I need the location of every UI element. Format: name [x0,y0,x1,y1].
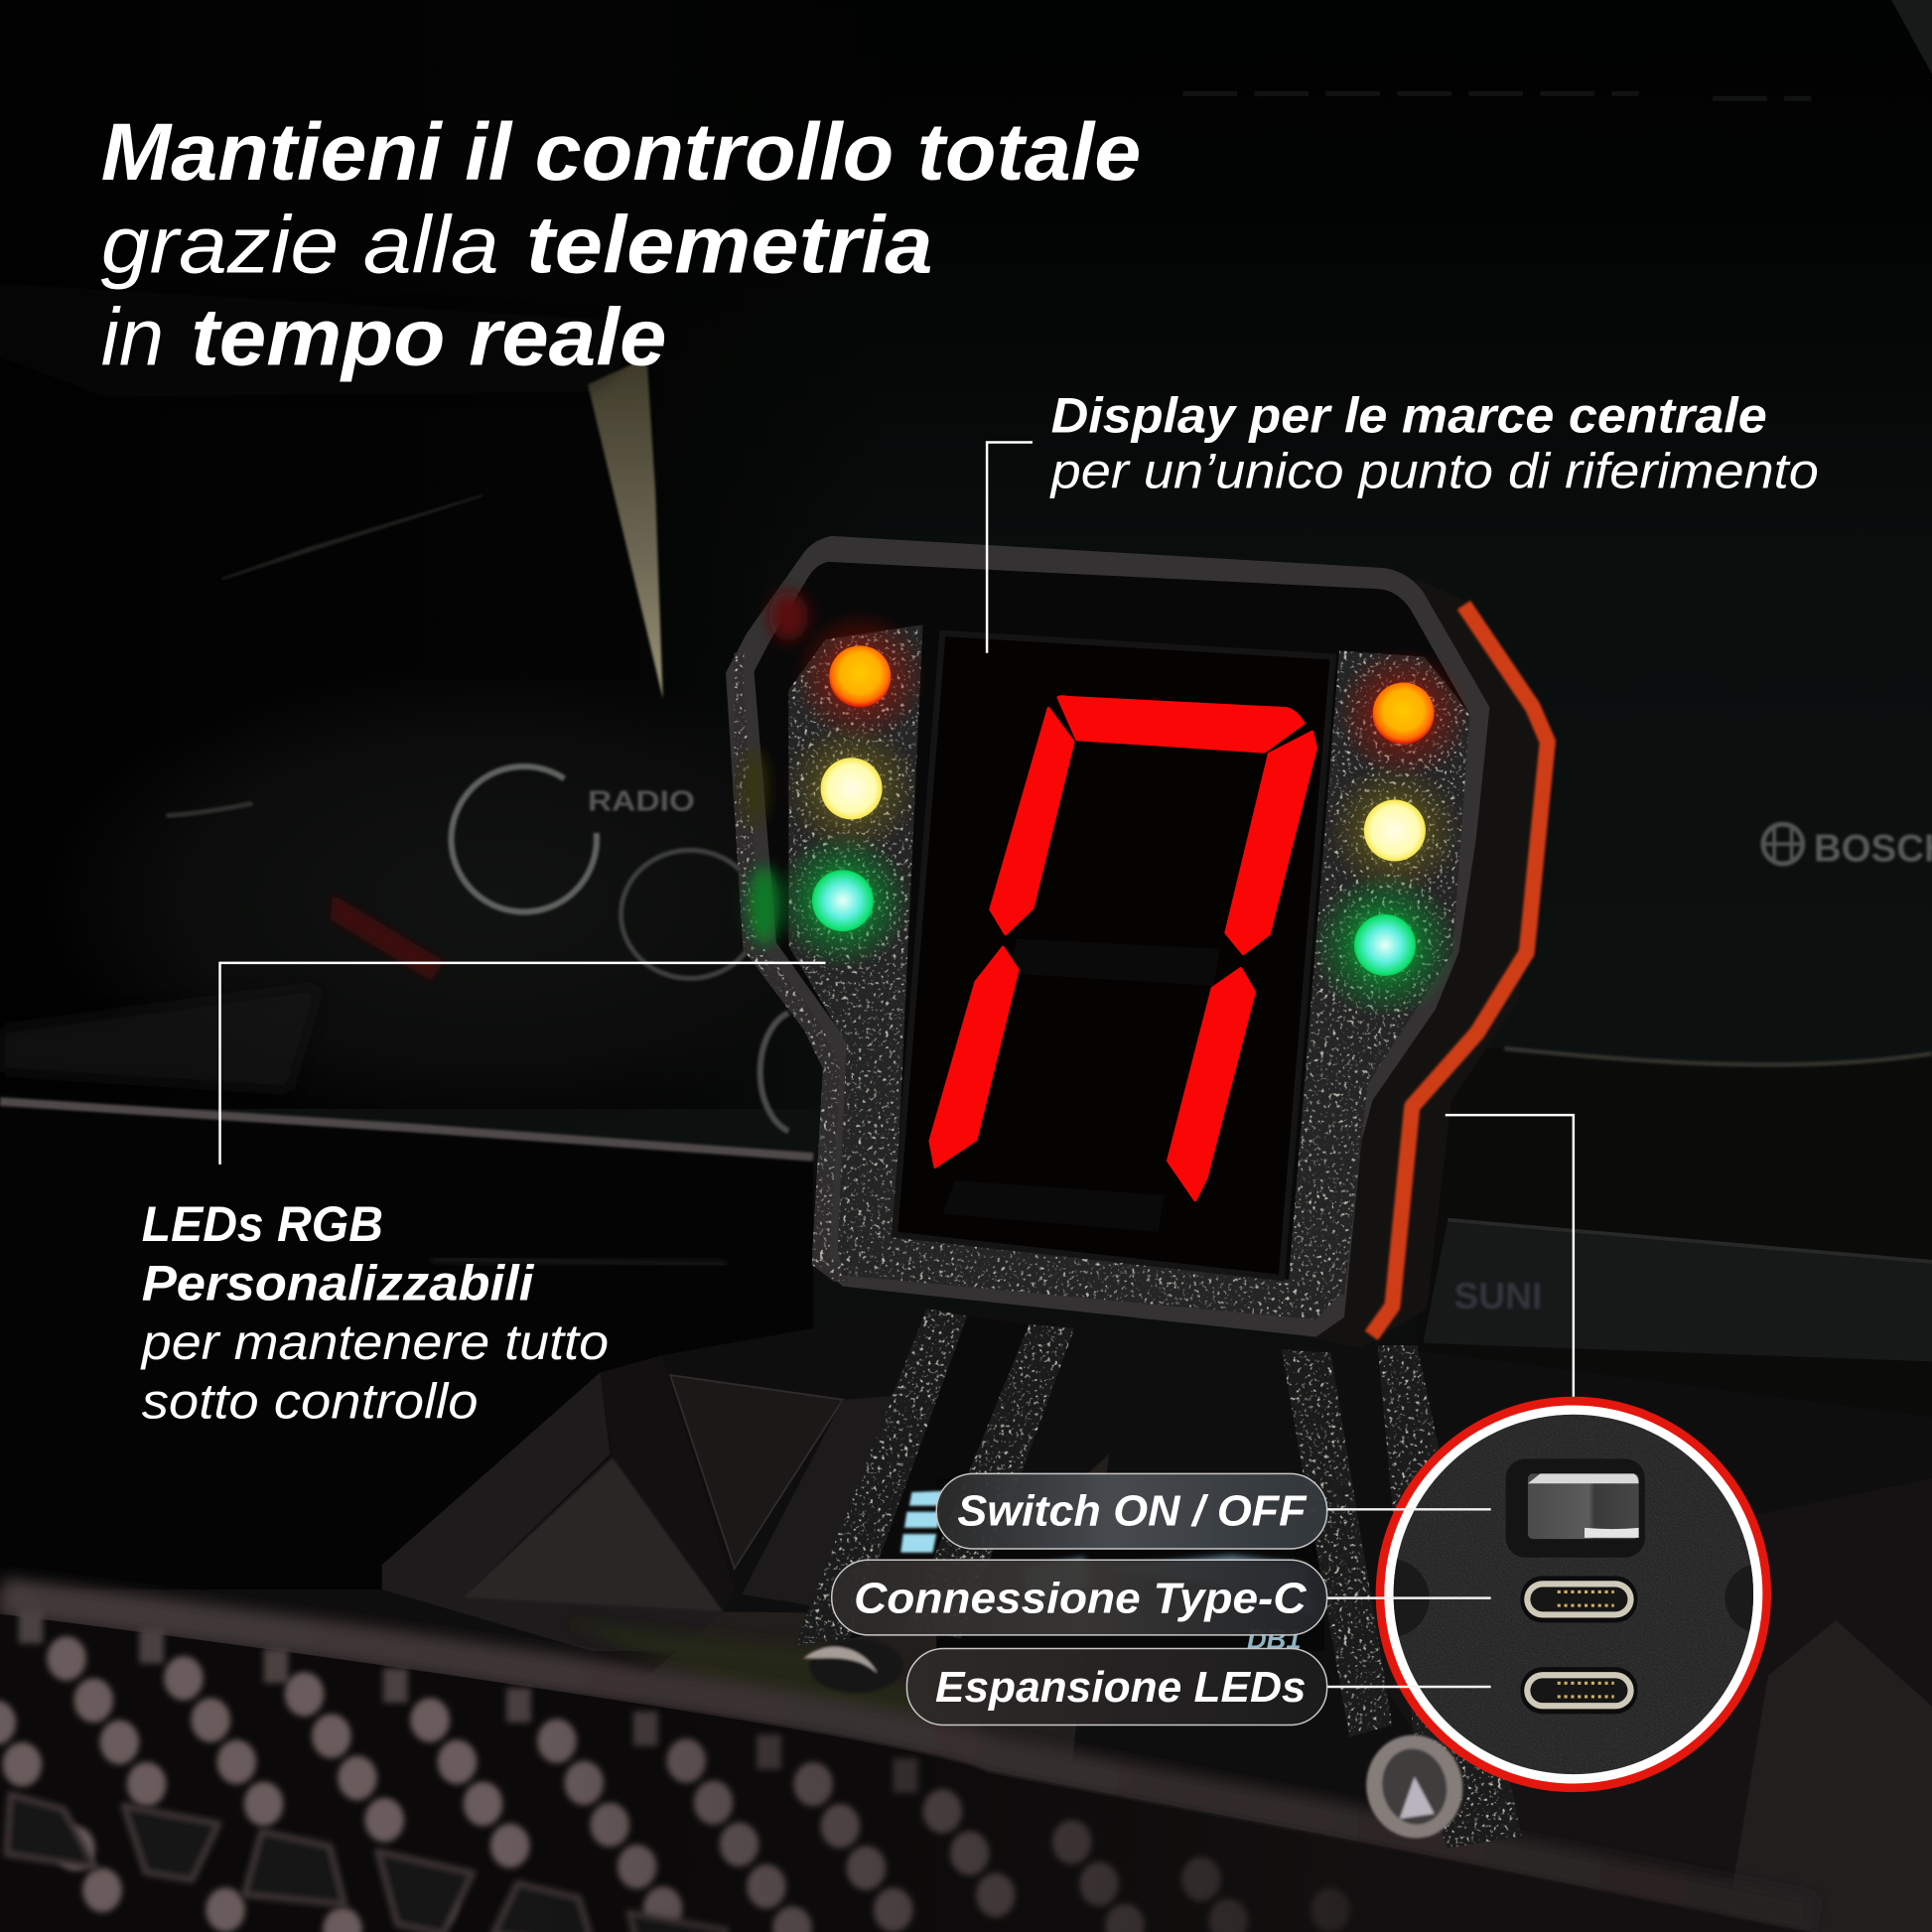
device: inner black cavity [755,562,1468,1313]
mesh: light top band [0,1596,1811,1917]
text block: LEDs callout: LEDs RGB [142,1196,383,1252]
text block: display callout [1048,388,1819,498]
segment: upper right [1226,732,1315,954]
background: center-right lower band [1417,1048,1932,1932]
mesh: woven dots [0,1632,1809,1932]
device: shell side with orange stripe [1307,579,1558,1348]
text block: display callout: per un’unico punto di riferimento [1048,443,1819,498]
text block: LEDs callout: per mantenere tutto [140,1314,609,1370]
text block: LEDs callout: Personalizzabili [142,1255,535,1311]
title: tempo reale [191,292,666,382]
seven-segment digit 7 [930,697,1315,1200]
carbon mesh grille [0,1589,1811,1932]
cyan display behind the stand: DB1 [1247,1624,1302,1655]
pill: Espansione LEDs [906,1649,1327,1725]
text block: display callout: Display per le marce centrale [1051,388,1767,444]
background: striped carbon trim [0,283,663,816]
device: left LED glow bleeding onto rim [743,592,808,945]
pill: Connessione Type-C [832,1560,1327,1635]
background: trim line left [0,1102,813,1157]
background: Bosch logo [1763,824,1932,871]
background: center console [0,1309,1932,1932]
LEDs: right column [1311,647,1470,1019]
background: carbon strip left [0,986,321,1090]
title [101,107,1141,382]
pill: Switch ON / OFF [936,1473,1327,1549]
text block: LEDs callout [140,1196,609,1429]
disc: dark back panel [1394,1415,1753,1774]
mesh: key openings [6,1794,727,1932]
device: front outer rim [726,536,1489,1337]
background: top right details [1182,0,1932,98]
background: radio dials [452,766,788,1131]
device: textured left panel [788,624,923,1248]
callout line: ports [1446,1115,1574,1400]
callout line: display [987,443,1033,653]
pill: Espansione LEDs: Espansione LEDs [935,1664,1307,1712]
title: in [101,292,164,382]
title: telemetria [526,200,932,290]
device: faint inactive segments [942,939,1220,1232]
device: gear display [726,536,1558,1348]
disc: mounting holes [1394,1559,1430,1636]
pill: Switch ON / OFF: Switch ON / OFF [957,1487,1308,1535]
pill connector lines [1327,1509,1491,1687]
segment: lower left [930,947,1018,1167]
background: SUNI label panel [1423,1220,1932,1361]
disc: USB-C port top [1520,1576,1637,1622]
LEDs: left column [773,610,926,970]
cyan display behind the stand [900,1491,1315,1655]
segment: lower right [1169,968,1254,1200]
background: trim line right [1504,1048,1932,1064]
segment: top [1058,697,1304,752]
background: radio label: RADIO [588,786,695,818]
title: grazie alla [101,200,499,290]
background: SUNI label panel: SUNI [1453,1275,1542,1316]
pill: Connessione Type-C: Connessione Type-C [854,1576,1307,1623]
device: textured bottom panel [838,1237,1339,1319]
screw: small, left [803,1639,903,1693]
device: screen [895,633,1333,1278]
disc: rocker switch [1506,1458,1645,1558]
disc: USB-C port bottom [1520,1667,1637,1714]
zoom circle: ports detail [1350,1401,1794,1788]
callout line: LEDs [220,963,826,1165]
mesh: band notches [19,1609,918,1793]
screw: large silver bolt [1357,1726,1472,1848]
background: left mid panel [50,665,936,1134]
device: textured left rim edge [735,653,848,1282]
stand legs [794,1309,1522,1849]
background: lower left dark band [0,1105,813,1589]
segment: upper left [991,709,1073,934]
text block: LEDs callout: sotto controllo [142,1373,479,1429]
device: textured right panel [1288,650,1470,1295]
background: red warning glyph [331,895,444,981]
title: Mantieni il controllo totale [101,107,1141,198]
